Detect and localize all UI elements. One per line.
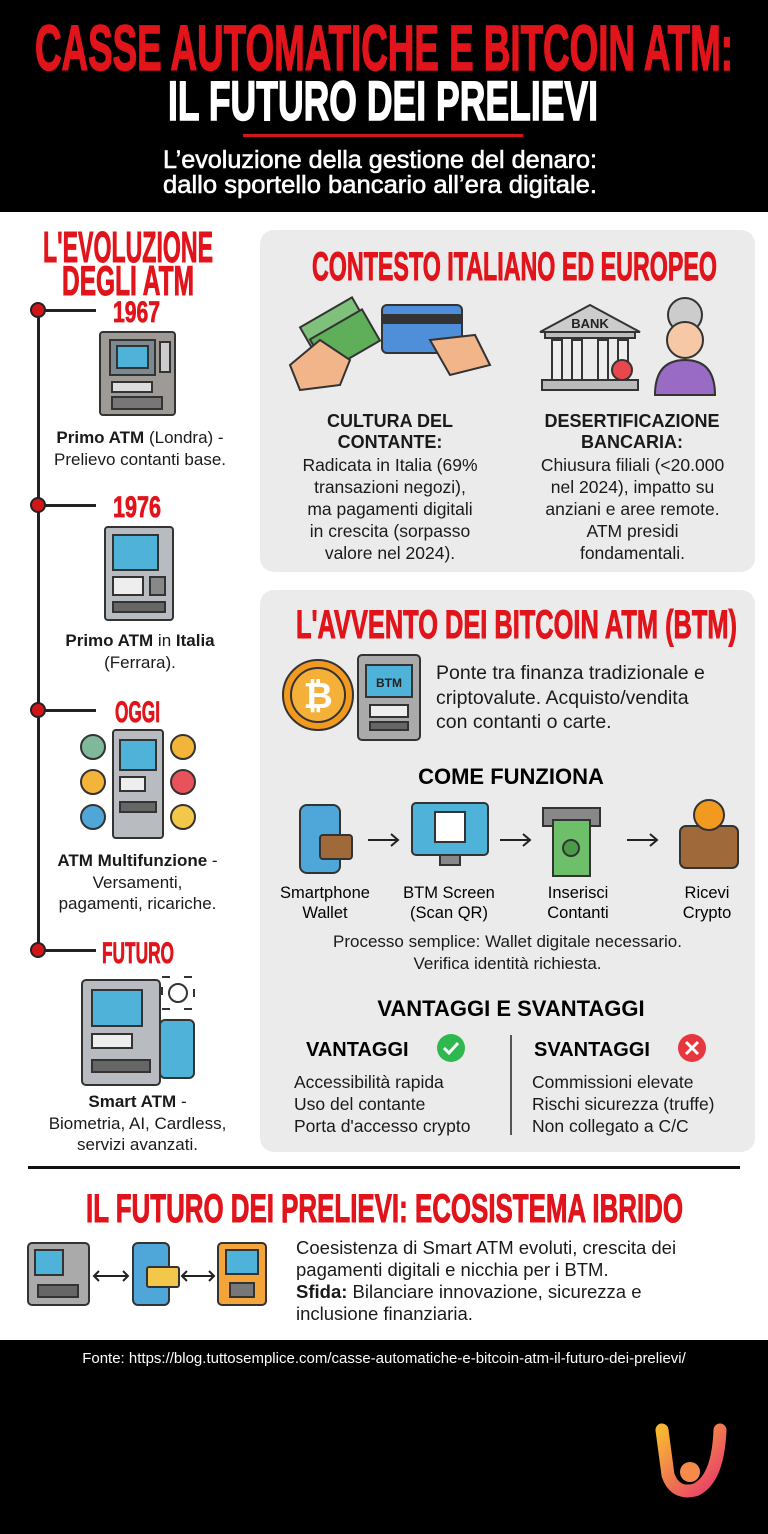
timeline text 1967: [54, 428, 226, 468]
years: FUTURO: [102, 937, 174, 970]
text: ecosistema: [296, 1237, 676, 1324]
step labels: Crypto: [683, 904, 731, 922]
list: vantaggi: Uso del contante: [294, 1094, 425, 1114]
text: processo: Verifica identità richiesta.: [413, 954, 602, 973]
timeline text futuro: Biometria, AI, Cardless,: [49, 1114, 226, 1132]
timeline text oggi: ATM Multifunzione -: [57, 851, 218, 870]
step labels: (Scan QR): [410, 904, 488, 922]
icon: bank: BANK: [571, 316, 609, 331]
steps icons: [300, 800, 738, 876]
logo: [656, 1424, 726, 1498]
list: vantaggi: Accessibilità rapida: [294, 1072, 444, 1092]
text: BTM intro: Ponte tra finanza tradizionale e: [436, 662, 705, 684]
text: processo: [333, 932, 682, 973]
header: [0, 0, 768, 212]
icon: bitcoin coin: ₿: [303, 675, 333, 716]
years: [102, 296, 174, 970]
list: vantaggi: Porta d'accesso crypto: [294, 1116, 470, 1136]
panel: bitcoin ATM: SVANTAGGI: [534, 1039, 650, 1061]
list: svantaggi: Commissioni elevate: [532, 1072, 693, 1092]
text: BTM intro: [436, 662, 705, 733]
text: cultura: in crescita (sorpasso: [310, 521, 470, 541]
icon: cash and card: [290, 297, 490, 390]
list: vantaggi: [294, 1072, 470, 1136]
heading: vantaggi e svantaggi: VANTAGGI E SVANTAGGI: [377, 996, 645, 1021]
text: cultura: ma pagamenti digitali: [307, 499, 473, 519]
panel: bitcoin ATM: [260, 590, 755, 1152]
subheads: DESERTIFICAZIONE: [544, 411, 720, 431]
step labels: Smartphone: [280, 884, 370, 902]
icon: check: [437, 1034, 465, 1062]
icon: bitcoin coin: [283, 660, 353, 730]
icon: BTM machine: BTM: [376, 676, 402, 690]
text: cultura: transazioni negozi),: [314, 477, 466, 497]
icon: ATM 1967: [100, 332, 175, 415]
list: svantaggi: Rischi sicurezza (truffe): [532, 1094, 715, 1114]
timeline text oggi: [57, 851, 218, 913]
text: desertificazione: [541, 455, 724, 563]
arrows: [368, 834, 657, 846]
timeline text futuro: Smart ATM -: [88, 1092, 187, 1111]
panel: bitcoin ATM: VANTAGGI: [306, 1039, 409, 1061]
timeline text 1967: Primo ATM (Londra) -: [56, 428, 224, 447]
icon: multifunction ATM: [81, 730, 195, 838]
subheads: [327, 411, 720, 452]
step labels: Wallet: [302, 904, 348, 922]
icon: smart ATM: [82, 977, 194, 1085]
text: ecosistema: Sfida: Bilanciare innovazione, sicurezza e: [296, 1281, 642, 1302]
timeline text 1976: Primo ATM in Italia: [65, 631, 215, 650]
timeline heading: [43, 223, 213, 304]
icon: cross: [678, 1034, 706, 1062]
text: desertificazione: fondamentali.: [580, 543, 685, 563]
step labels: Inserisci: [548, 884, 608, 902]
timeline text oggi: Versamenti,: [93, 872, 182, 892]
timeline column: [30, 223, 226, 1154]
timeline text oggi: pagamenti, ricariche.: [59, 894, 216, 913]
text: desertificazione: anziani e aree remote.: [545, 499, 720, 519]
heading: come funziona: COME FUNZIONA: [418, 764, 604, 789]
text: BTM intro: con contanti o carte.: [436, 711, 612, 733]
panel: contesto: [260, 230, 755, 572]
step labels: Contanti: [547, 904, 609, 922]
footer: [0, 1340, 768, 1534]
text: BTM intro: criptovalute. Acquisto/vendita: [436, 686, 689, 708]
subheads: BANCARIA:: [581, 432, 683, 452]
years: 1976: [113, 491, 161, 524]
text: ecosistema: Coesistenza di Smart ATM evoluti, crescita dei: [296, 1237, 676, 1258]
text: ecosistema: pagamenti digitali e nicchia per i BTM.: [296, 1259, 609, 1280]
subheads: CULTURA DEL: [327, 411, 453, 431]
icons: ATM phone BTM: [28, 1243, 266, 1305]
timeline text 1976: [65, 631, 215, 672]
text: cultura: Radicata in Italia (69%: [302, 455, 478, 475]
timeline text 1976: (Ferrara).: [104, 652, 176, 672]
years: OGGI: [115, 696, 160, 729]
list: svantaggi: [532, 1072, 715, 1136]
subtitle: L’evoluzione della gestione del denaro:: [163, 146, 597, 174]
timeline text 1967: Prelievo contanti base.: [54, 450, 226, 468]
step labels: [280, 884, 731, 922]
section: futuro ibrido: [27, 1187, 683, 1324]
text: cultura: [302, 455, 478, 563]
text: desertificazione: ATM presidi: [586, 521, 679, 541]
icon: BTM machine: [358, 655, 420, 740]
step labels: BTM Screen: [403, 884, 495, 902]
text: ecosistema: inclusione finanziaria.: [296, 1303, 473, 1324]
text: cultura: valore nel 2024).: [325, 543, 455, 563]
text: desertificazione: nel 2024), impatto su: [551, 477, 714, 497]
list: svantaggi: Non collegato a C/C: [532, 1116, 689, 1136]
text: processo: Processo semplice: Wallet digitale necessario.: [333, 932, 682, 951]
step labels: Ricevi: [685, 884, 729, 902]
icon: bank: [540, 305, 640, 390]
icon: ATM 1976: [105, 527, 173, 620]
years: 1967: [113, 296, 160, 329]
icon: elderly woman: [655, 298, 715, 395]
timeline text futuro: [49, 1092, 226, 1154]
header: dallo sportello bancario all’era digitale.: [163, 171, 597, 199]
subheads: CONTANTE:: [338, 432, 442, 452]
timeline text futuro: servizi avanzati.: [77, 1135, 198, 1154]
source text: Fonte: https://blog.tuttosemplice.com/casse-automatiche-e-bitcoin-atm-il-futuro-dei-prelievi/: [82, 1350, 686, 1367]
text: desertificazione: Chiusura filiali (<20.000: [541, 455, 724, 475]
